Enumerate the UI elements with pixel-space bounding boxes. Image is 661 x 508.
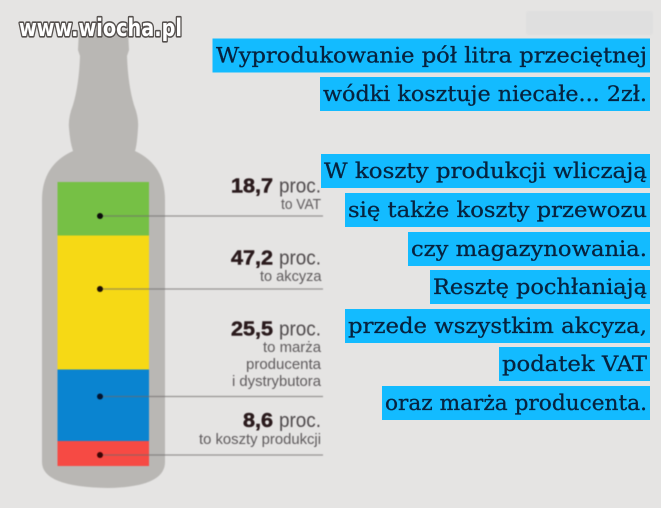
label: 47,2 proc. to akcyza: 47,2 [231, 248, 273, 270]
line 2 [320, 77, 650, 111]
bottle chart [42, 30, 165, 488]
label: 47,2 proc. to akcyza [231, 248, 322, 285]
label: 25,5 proc. to marża producenta i dystrybutora: proc. [279, 318, 321, 340]
segment: production red [58, 441, 149, 466]
leader line: VAT [97, 213, 323, 219]
line 4: Resztę pochłaniają [433, 275, 647, 300]
label: 25,5 proc. to marża producenta i dystrybutora: i dystrybutora [232, 374, 322, 390]
line 2 [345, 193, 650, 227]
line 6: podatek VAT [502, 352, 648, 377]
line 2: wódki kosztuje niecałe... 2zł. [323, 82, 647, 107]
watermark: www.wiocha.pl [19, 14, 182, 42]
leader line: margin [97, 394, 323, 400]
segment: VAT green [58, 182, 149, 236]
leader line: production [97, 452, 323, 458]
line 7: oraz marża producenta. [385, 391, 647, 416]
label: 18,7 proc. to VAT: to VAT [281, 197, 321, 213]
label: 8,6 proc. to koszty produkcji: proc. [279, 410, 321, 432]
line 5 [345, 309, 650, 343]
line 3: czy magazynowania. [411, 237, 647, 262]
line 1: Wyprodukowanie pół litra przeciętnej [216, 44, 647, 68]
label: 47,2 proc. to akcyza: to akcyza [260, 269, 322, 285]
label: 25,5 proc. to marża producenta i dystrybutora: to marża [263, 340, 322, 356]
text block: explanation [321, 154, 650, 420]
line 3 [408, 232, 650, 266]
label: 8,6 proc. to koszty produkcji: to koszty produkcji [199, 432, 321, 448]
leader line: excise [97, 286, 323, 292]
line 2: się także koszty przewozu [348, 198, 647, 223]
line 6 [499, 347, 650, 381]
bottle silhouette [42, 30, 165, 488]
line 1: W koszty produkcji wliczają [324, 159, 647, 184]
line 5: przede wszystkim akcyza, [348, 314, 647, 339]
label: 47,2 proc. to akcyza: proc. [279, 248, 321, 270]
line 4 [430, 270, 650, 304]
label: 25,5 proc. to marża producenta i dystrybutora: 25,5 [231, 318, 273, 340]
segment: margin blue [58, 370, 149, 441]
text block: headline [212, 38, 650, 111]
line 1 [212, 38, 650, 72]
segment: excise yellow [58, 236, 149, 370]
label: 18,7 proc. to VAT: 18,7 [231, 176, 273, 198]
label: 18,7 proc. to VAT [231, 176, 321, 213]
line 1 [321, 154, 650, 188]
label: 8,6 proc. to koszty produkcji [199, 410, 321, 448]
label: 8,6 proc. to koszty produkcji: 8,6 [243, 410, 273, 432]
label: 25,5 proc. to marża producenta i dystrybutora [231, 318, 322, 390]
label: 18,7 proc. to VAT: proc. [279, 176, 321, 198]
label: 25,5 proc. to marża producenta i dystrybutora: producenta [246, 357, 322, 373]
